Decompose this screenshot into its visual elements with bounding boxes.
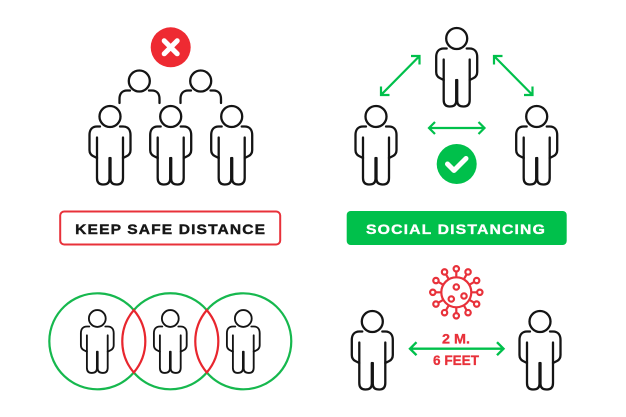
- chart: green personal space circles: [49, 293, 291, 389]
- banner: social distancing: SOCIAL DISTANCING: [366, 221, 546, 237]
- banner: keep safe distance: KEEP SAFE DISTANCE: [75, 221, 266, 237]
- label: 2 m.: 2 M.: [442, 330, 470, 346]
- icon: red cross badge: [151, 27, 191, 67]
- icon: red virus: [430, 266, 482, 318]
- panel: two metre distance: [352, 266, 560, 390]
- panel: overlapping circles: [49, 293, 291, 389]
- icon: three spaced people: [356, 28, 557, 184]
- panel: keep safe distance: [60, 27, 280, 244]
- icon: two people apart: [352, 311, 560, 390]
- arrows: green distance arrows: [381, 56, 532, 134]
- arrow: distance arrow: [410, 342, 504, 355]
- panel: social distancing: [347, 28, 567, 245]
- banner: keep safe distance: [60, 212, 280, 244]
- icon: crowded people group: [90, 70, 252, 184]
- banner: social distancing: [347, 211, 567, 245]
- icon: green check badge: [437, 144, 477, 184]
- chart: red overlap zones: [122, 310, 218, 372]
- icon: people in circles: [81, 310, 260, 373]
- label: 6 feet: 6 FEET: [433, 352, 479, 368]
